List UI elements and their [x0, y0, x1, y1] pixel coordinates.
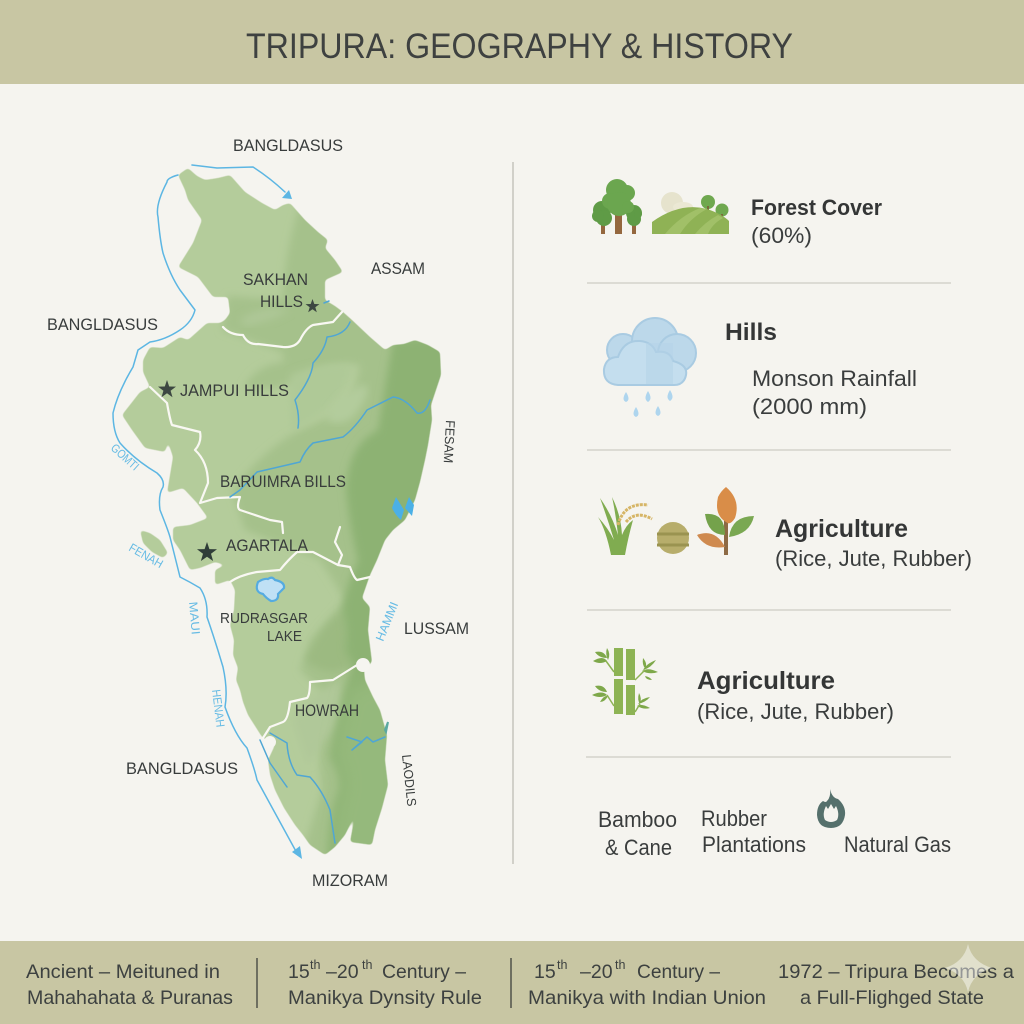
panel: agriculture — [598, 487, 972, 571]
text: rubber plantations: Rubber — [701, 806, 767, 831]
timeline item: Manikya dynasty: Century – — [382, 961, 466, 983]
icon: sparkle watermark — [945, 944, 992, 992]
timeline item: Manikya dynasty: 15 — [288, 961, 310, 983]
heading: forest cover: Forest Cover — [751, 195, 882, 220]
timeline item: Manikya dynasty: th — [310, 958, 320, 972]
timeline item: Indian union: Century – — [637, 961, 720, 983]
text: rubber plantations: Plantations — [702, 832, 806, 857]
map label: Bangladesh south: BANGLDASUS — [126, 759, 238, 778]
timeline item: Indian union — [528, 958, 766, 1009]
timeline item: Manikya dynasty: Manikya Dynsity Rule — [288, 987, 482, 1009]
timeline item: Indian union: –20 — [580, 961, 613, 983]
heading: agriculture: Agriculture — [775, 515, 908, 543]
timeline item: Indian union: th — [615, 958, 625, 972]
timeline item: Indian union: th — [557, 958, 567, 972]
timeline item: 1972 statehood — [778, 961, 1014, 1009]
icon: river arrowheads — [282, 190, 302, 859]
timeline item: ancient: Ancient – Meituned in — [26, 961, 220, 983]
timeline item: Manikya dynasty — [288, 958, 482, 1009]
river label: Gomti: GOMTI — [108, 441, 142, 473]
icon: bamboo — [592, 648, 658, 715]
timeline item: ancient: Mahahahata & Puranas — [27, 987, 233, 1009]
map label: Assam: ASSAM — [371, 259, 425, 278]
white district boundaries — [150, 312, 370, 748]
map label: Rudrasgar Lake: RUDRASGAR — [220, 610, 308, 627]
title: TRIPURA: GEOGRAPHY & HISTORY — [246, 27, 793, 66]
icon: star Sakhan Hills — [306, 299, 320, 312]
text: 60%: (60%) — [751, 223, 812, 248]
river label: Fenah: FENAH — [126, 540, 166, 571]
icon: rice plant — [598, 497, 652, 555]
text: bamboo and cane: Bamboo — [598, 807, 677, 832]
text: monsoon rainfall — [752, 366, 917, 419]
map of Tripura — [47, 136, 469, 890]
timeline item: Manikya dynasty: –20 — [326, 961, 359, 983]
map landmass with relief shading — [122, 168, 442, 854]
map label: Rudrasgar Lake — [220, 610, 308, 645]
text: crops: (Rice, Jute, Rubber) — [775, 546, 972, 571]
map label: Fesam: FESAM — [441, 420, 458, 464]
text: bamboo and cane — [598, 807, 677, 860]
icon: rubber plant — [697, 487, 754, 555]
icon: rain cloud — [604, 318, 696, 417]
timeline item: 1972 statehood: 1972 – Tripura Becomes a — [778, 961, 1014, 983]
text: crops: (Rice, Jute, Rubber) — [697, 699, 894, 724]
icon: Rudrasagar lake — [257, 578, 284, 601]
map label: Laodils: LAODILS — [399, 754, 419, 807]
header band — [0, 0, 1024, 84]
blue rivers — [113, 165, 430, 855]
text: natural gas: Natural Gas — [844, 832, 951, 857]
map label: Lussam: LUSSAM — [404, 619, 469, 638]
map label: Bangladesh west: BANGLDASUS — [47, 315, 158, 334]
timeline item: Indian union: 15 — [534, 961, 556, 983]
map label: Bangladesh north: BANGLDASUS — [233, 136, 343, 155]
panel: resources — [598, 789, 951, 860]
icon: hills landscape — [652, 192, 729, 234]
icon: small coastal water — [385, 722, 388, 732]
timeline item: ancient — [26, 961, 233, 1009]
icon: star Agartala capital — [197, 542, 217, 561]
icon: star Jampui Hills — [158, 380, 176, 397]
timeline item: 1972 statehood: a Full-Flighged State — [800, 987, 984, 1009]
icon: gas flame — [817, 789, 845, 828]
panel: bamboo — [592, 648, 894, 724]
panel: hills and rainfall — [604, 318, 917, 419]
footer timeline — [0, 941, 1024, 1024]
map label: Rudrasgar Lake: LAKE — [267, 628, 302, 645]
map label: Agartala: AGARTALA — [226, 536, 309, 555]
text: rubber plantations — [701, 806, 806, 857]
map label: Mizoram: MIZORAM — [312, 871, 388, 890]
icon: trees — [592, 179, 642, 234]
timeline item: Manikya dynasty: th — [362, 958, 372, 972]
timeline item: Indian union: Manikya with Indian Union — [528, 987, 766, 1009]
river label: Henah: HENAH — [209, 689, 228, 728]
map label: Sakhan Hills: SAKHAN — [243, 270, 308, 289]
heading: hills: Hills — [725, 319, 777, 346]
map label: Baruimra Bills: BARUIMRA BILLS — [220, 472, 346, 491]
text: monsoon rainfall: Monson Rainfall — [752, 366, 917, 391]
text: bamboo and cane: & Cane — [605, 835, 672, 860]
river label: Hammi: HAMMI — [373, 600, 401, 643]
map label: Sakhan Hills: HILLS — [260, 292, 303, 311]
icon: eastern water body — [392, 497, 414, 520]
map label: Howrah: HOWRAH — [295, 701, 359, 720]
heading: agriculture: Agriculture — [697, 667, 835, 695]
map label: Jampui Hills: JAMPUI HILLS — [180, 381, 289, 400]
panel: forest cover — [592, 179, 882, 248]
river label: Maui: MAUI — [186, 601, 203, 635]
icon: jute ball — [657, 522, 689, 554]
text: monsoon rainfall: (2000 mm) — [752, 394, 867, 419]
map label: Sakhan Hills — [243, 270, 308, 311]
